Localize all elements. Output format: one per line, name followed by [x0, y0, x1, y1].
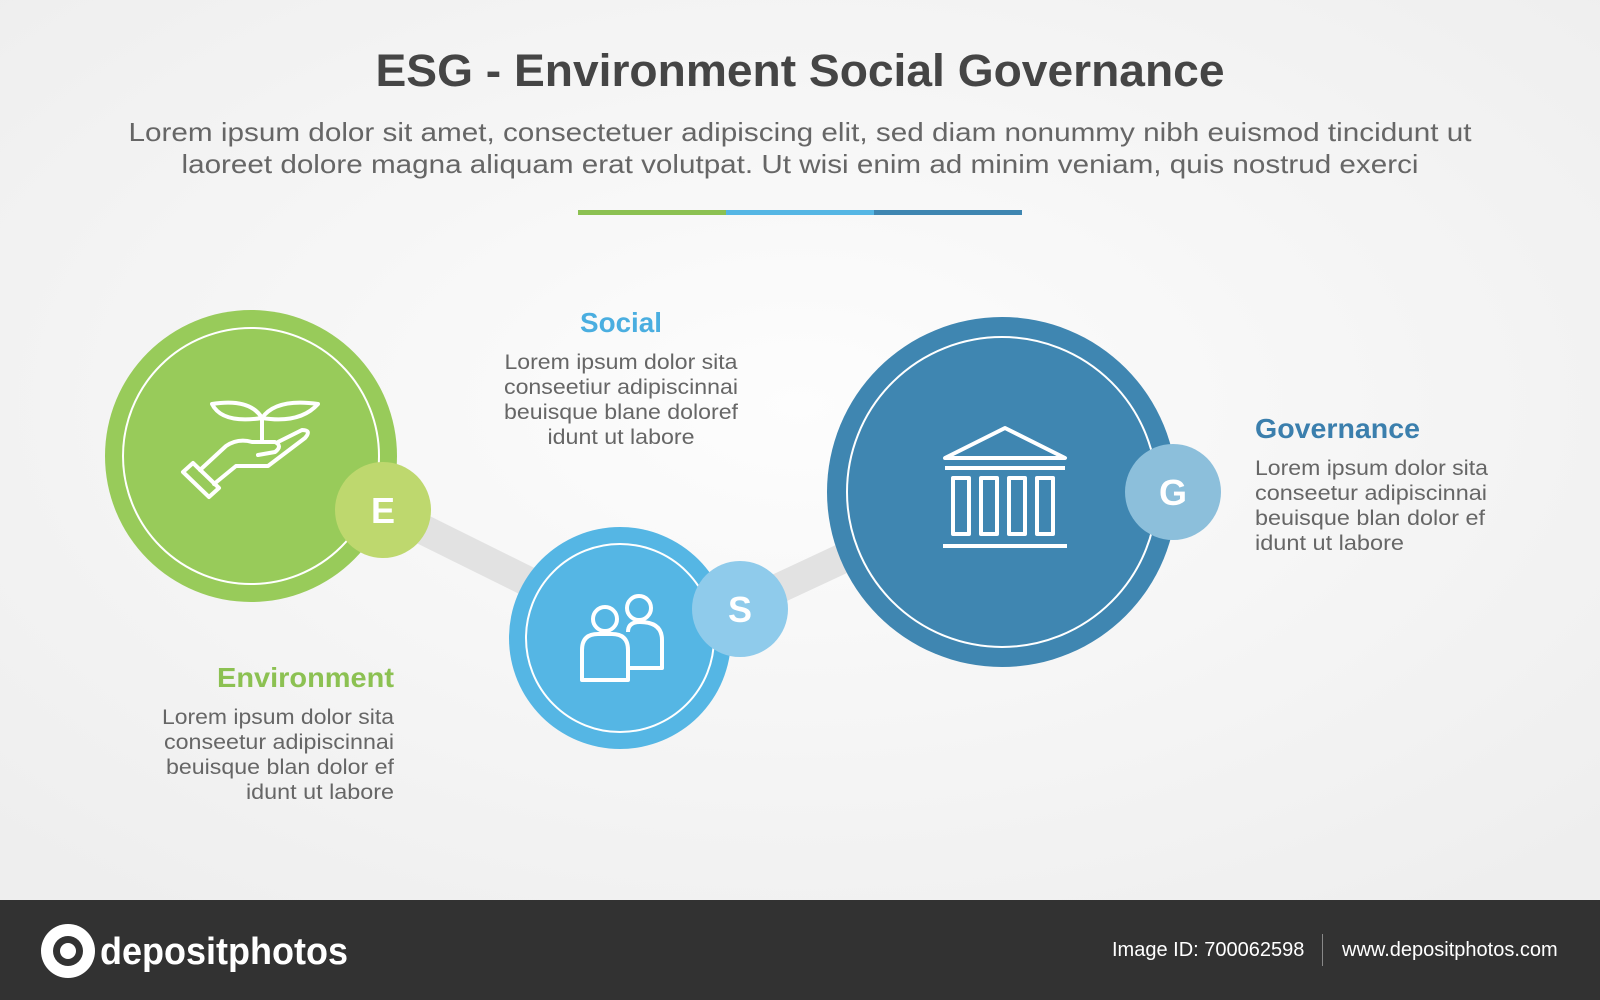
text: environment: idunt ut labore — [246, 781, 394, 804]
text: environment — [162, 662, 394, 804]
icon: people — [582, 596, 662, 680]
icon: building — [943, 428, 1067, 546]
circle: governance — [827, 317, 1221, 667]
connectors — [420, 528, 850, 590]
text: environment: conseetur adipiscinnai — [164, 731, 394, 754]
subtitle: Lorem ipsum dolor sit amet, consectetuer adipiscing elit, sed diam nonummy nibh euismod tincidunt ut — [128, 117, 1472, 147]
subtitle: laoreet dolore magna aliquam erat volutpat. Ut wisi enim ad minim veniam, quis nostrud exerci — [182, 149, 1418, 179]
text: governance: conseetur adipiscinnai — [1255, 482, 1487, 505]
title: ESG - Environment Social Governance — [376, 45, 1224, 96]
circle: environment: E — [371, 490, 395, 531]
text: social — [504, 307, 738, 449]
icon: hand with plant — [183, 403, 318, 497]
circle: social — [509, 527, 788, 749]
footer logo: depositphotos — [100, 931, 348, 973]
badge: S — [692, 561, 788, 657]
text: governance: Governance — [1255, 413, 1420, 444]
footer info — [1112, 934, 1558, 966]
title underline — [578, 210, 1022, 215]
text: environment: Lorem ipsum dolor sita — [162, 706, 394, 729]
footer logo — [41, 924, 348, 978]
text: social: Social — [580, 307, 662, 338]
text: governance: beuisque blan dolor ef — [1255, 507, 1485, 530]
text: social: conseetiur adipiscinnai — [504, 376, 738, 399]
text: governance: Lorem ipsum dolor sita — [1255, 457, 1488, 480]
subtitle — [128, 117, 1472, 179]
footer info: www.depositphotos.com — [1341, 939, 1558, 961]
text: environment: Environment — [217, 662, 394, 693]
badge: G — [1125, 444, 1221, 540]
circle: social: S — [728, 589, 752, 630]
text: social: beuisque blane doloref — [504, 401, 738, 424]
badge: E — [335, 462, 431, 558]
circle: governance: G — [1159, 472, 1187, 513]
circle: environment — [105, 310, 431, 602]
text: environment: beuisque blan dolor ef — [166, 756, 394, 779]
footer bar — [0, 900, 1600, 1000]
text: social: Lorem ipsum dolor sita — [504, 351, 738, 374]
text: governance: idunt ut labore — [1255, 532, 1404, 555]
text: social: idunt ut labore — [548, 426, 694, 449]
footer info: Image ID: 700062598 — [1112, 939, 1304, 961]
text: governance — [1255, 413, 1488, 555]
